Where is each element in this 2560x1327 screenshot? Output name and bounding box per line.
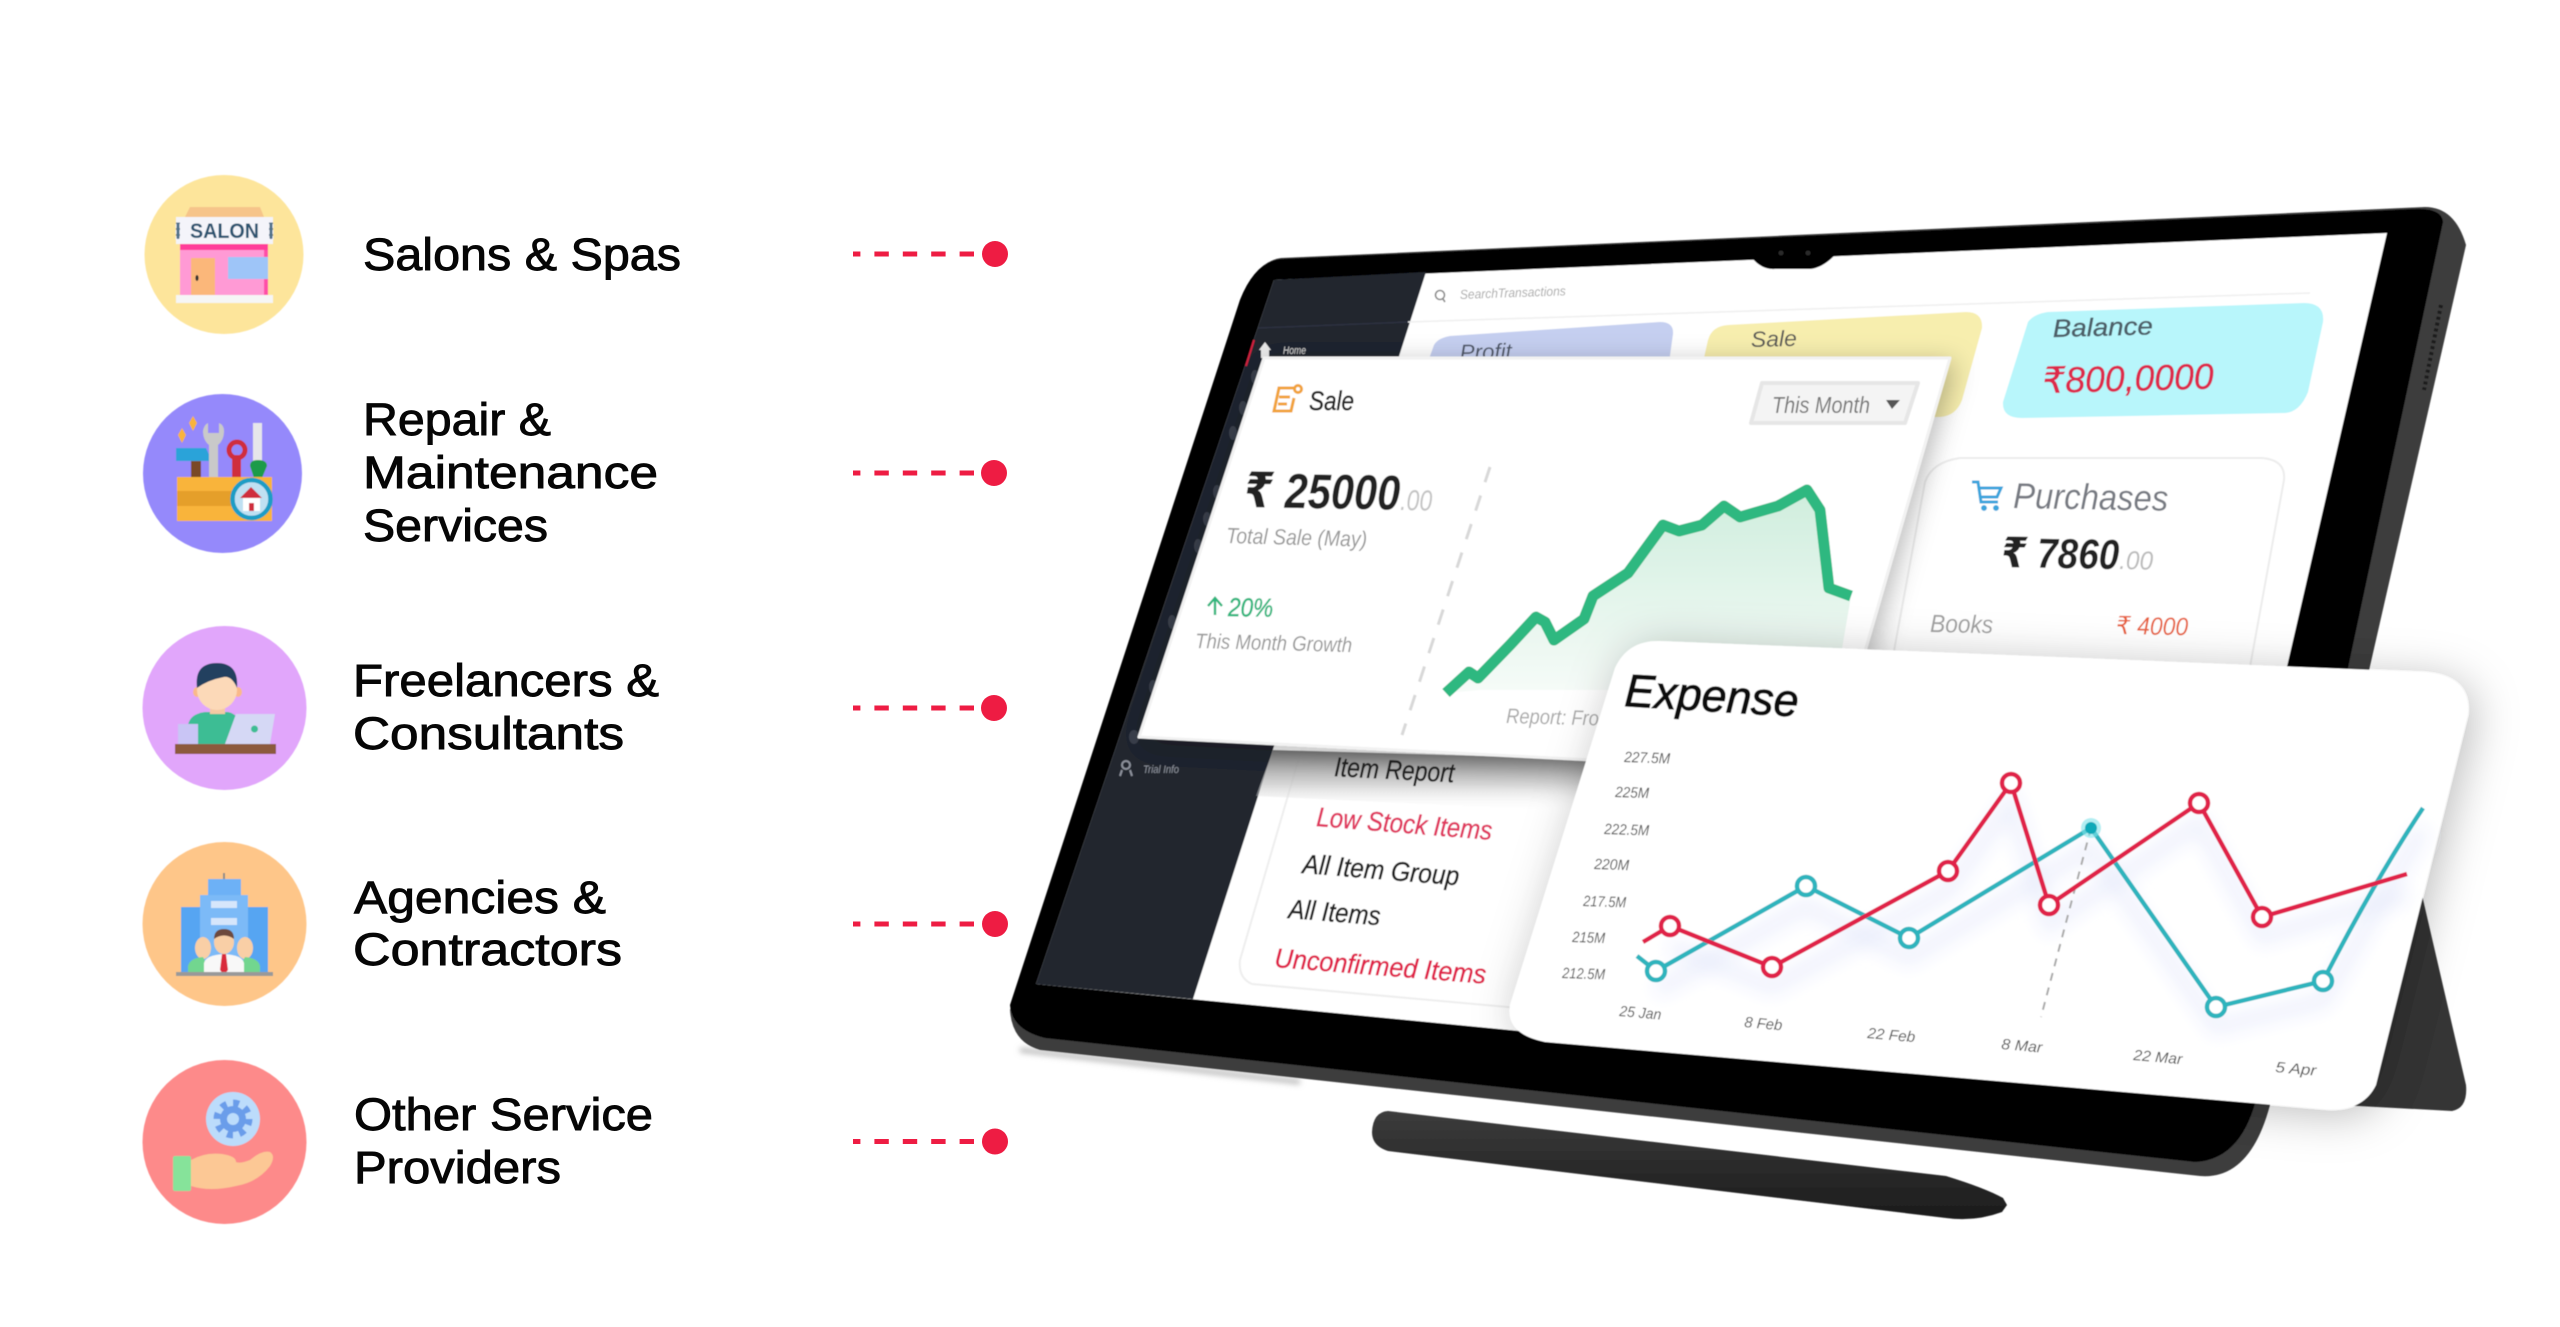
panel: purchases: ₹ 7860 xyxy=(2001,529,2120,578)
x axis labels xyxy=(1618,1003,2318,1080)
item: Other Service Providers xyxy=(142,1060,1008,1224)
month dropdown: This Month xyxy=(1772,392,1870,418)
icon: salon: SALON xyxy=(190,220,259,243)
icon: salon xyxy=(144,175,304,334)
icon: gear in hand xyxy=(142,1060,306,1224)
label: Maintenance xyxy=(363,447,658,498)
growth: This Month Growth xyxy=(1195,630,1352,657)
panel: sale: .00 xyxy=(1400,485,1432,518)
x axis labels: 25 Jan xyxy=(1618,1003,1662,1024)
panel: sale: Report: From xyxy=(1506,705,1614,731)
item: Salons & Spas xyxy=(144,175,1008,334)
panel: purchases: .00 xyxy=(2119,545,2154,576)
sale card background xyxy=(1139,358,1950,772)
tablet stand xyxy=(2340,800,2466,1111)
y axis labels xyxy=(1561,749,1671,984)
panel: sale: Total Sale (May) xyxy=(1226,523,1367,552)
connector xyxy=(853,1128,1008,1154)
panel: expense xyxy=(1509,641,2468,1110)
connector xyxy=(853,695,1007,721)
panel: sale xyxy=(1139,358,1950,772)
stat card: profit: Profit xyxy=(1459,339,1513,365)
icon: trial info xyxy=(1120,761,1132,776)
stat card: balance: ₹800,0000 xyxy=(2042,356,2214,401)
label xyxy=(363,394,658,551)
panel: item report: Unconfirmed Items xyxy=(1274,943,1487,990)
label: Agencies & xyxy=(354,872,606,923)
stat card: profit xyxy=(1425,322,1673,370)
label xyxy=(353,655,659,759)
label: Repair & xyxy=(363,394,551,445)
y axis labels: 217.5M xyxy=(1582,893,1627,912)
sidebar: Home xyxy=(1283,345,1306,357)
y axis labels: 212.5M xyxy=(1561,965,1606,984)
stat card: sale: Sale xyxy=(1750,326,1797,352)
growth: 20% xyxy=(1227,592,1273,623)
y axis labels: 227.5M xyxy=(1623,749,1671,768)
panel: sale: Sale xyxy=(1309,386,1354,416)
month dropdown xyxy=(1751,383,1918,423)
panel: expense: Expense xyxy=(1623,664,1800,727)
y axis labels: 215M xyxy=(1571,929,1606,947)
expense card background xyxy=(1509,641,2468,1110)
x axis labels: 8 Feb xyxy=(1744,1014,1783,1034)
x axis labels: 5 Apr xyxy=(2275,1059,2318,1080)
tablet mockup xyxy=(1010,207,2468,1219)
red series xyxy=(1643,774,2407,976)
panel: item report: All Items xyxy=(1286,894,1382,931)
item: Freelancers & Consultants xyxy=(142,626,1007,790)
panel: sale: ₹ 25000 xyxy=(1244,464,1401,521)
speaker grille xyxy=(2424,305,2441,390)
growth xyxy=(1195,592,1352,657)
label: Salons & Spas xyxy=(363,229,681,280)
stat card: balance xyxy=(2003,303,2323,418)
label: Providers xyxy=(354,1142,561,1193)
panel: item report xyxy=(1240,750,1620,1009)
sidebar: Trial Info xyxy=(1143,764,1179,776)
panel: purchases xyxy=(1885,458,2284,700)
sidebar xyxy=(1036,272,1426,999)
icon: freelancer xyxy=(142,626,306,790)
panel: purchases: Purchases xyxy=(2013,475,2169,519)
icon: agency xyxy=(142,842,306,1006)
item: Agencies & Contractors xyxy=(142,842,1008,1006)
icon: cart xyxy=(1972,482,2001,509)
panel: item report: Low Stock Items xyxy=(1316,802,1493,846)
expense line chart xyxy=(1637,774,2423,1027)
label: Consultants xyxy=(353,708,624,759)
panel: purchases: Books xyxy=(1930,610,1993,639)
x axis labels: 22 Feb xyxy=(1866,1025,1916,1046)
label: Other Service xyxy=(354,1089,653,1140)
y axis labels: 222.5M xyxy=(1603,821,1650,840)
ground shadow xyxy=(1020,1050,1300,1082)
panel: purchases: ₹ 4000 xyxy=(2116,612,2188,641)
connector xyxy=(853,911,1008,937)
label: Services xyxy=(363,500,548,551)
icon: home xyxy=(1259,342,1271,358)
teal series xyxy=(1637,808,2423,1016)
icon: tools xyxy=(143,394,302,553)
sale line chart xyxy=(1430,490,1851,715)
x axis labels: 8 Mar xyxy=(2001,1036,2044,1057)
y axis labels: 225M xyxy=(1614,784,1650,802)
item: Repair & Maintenance Services xyxy=(143,394,1007,553)
tablet frame xyxy=(1010,207,2466,1176)
tablet bezel xyxy=(1010,209,2443,1162)
connector xyxy=(853,241,1008,267)
label xyxy=(353,872,622,975)
stylus pen xyxy=(1372,1111,2007,1219)
connector xyxy=(853,460,1007,486)
screen xyxy=(1036,233,2387,1096)
search bar: SearchTransactions xyxy=(1460,283,1566,302)
search bar xyxy=(1408,283,2310,322)
icon: sale receipt xyxy=(1274,386,1302,411)
notch with cameras xyxy=(1752,250,1834,269)
label xyxy=(354,1089,653,1193)
stat card: sale xyxy=(1690,312,1982,420)
panel: item report: Item Report xyxy=(1334,752,1456,788)
y axis labels: 220M xyxy=(1593,856,1630,874)
panel: item report: All Item Group xyxy=(1300,849,1460,891)
stat card: balance: Balance xyxy=(2052,312,2153,343)
label: Freelancers & xyxy=(353,655,659,706)
label: Contractors xyxy=(353,924,622,975)
x axis labels: 22 Mar xyxy=(2132,1047,2184,1068)
